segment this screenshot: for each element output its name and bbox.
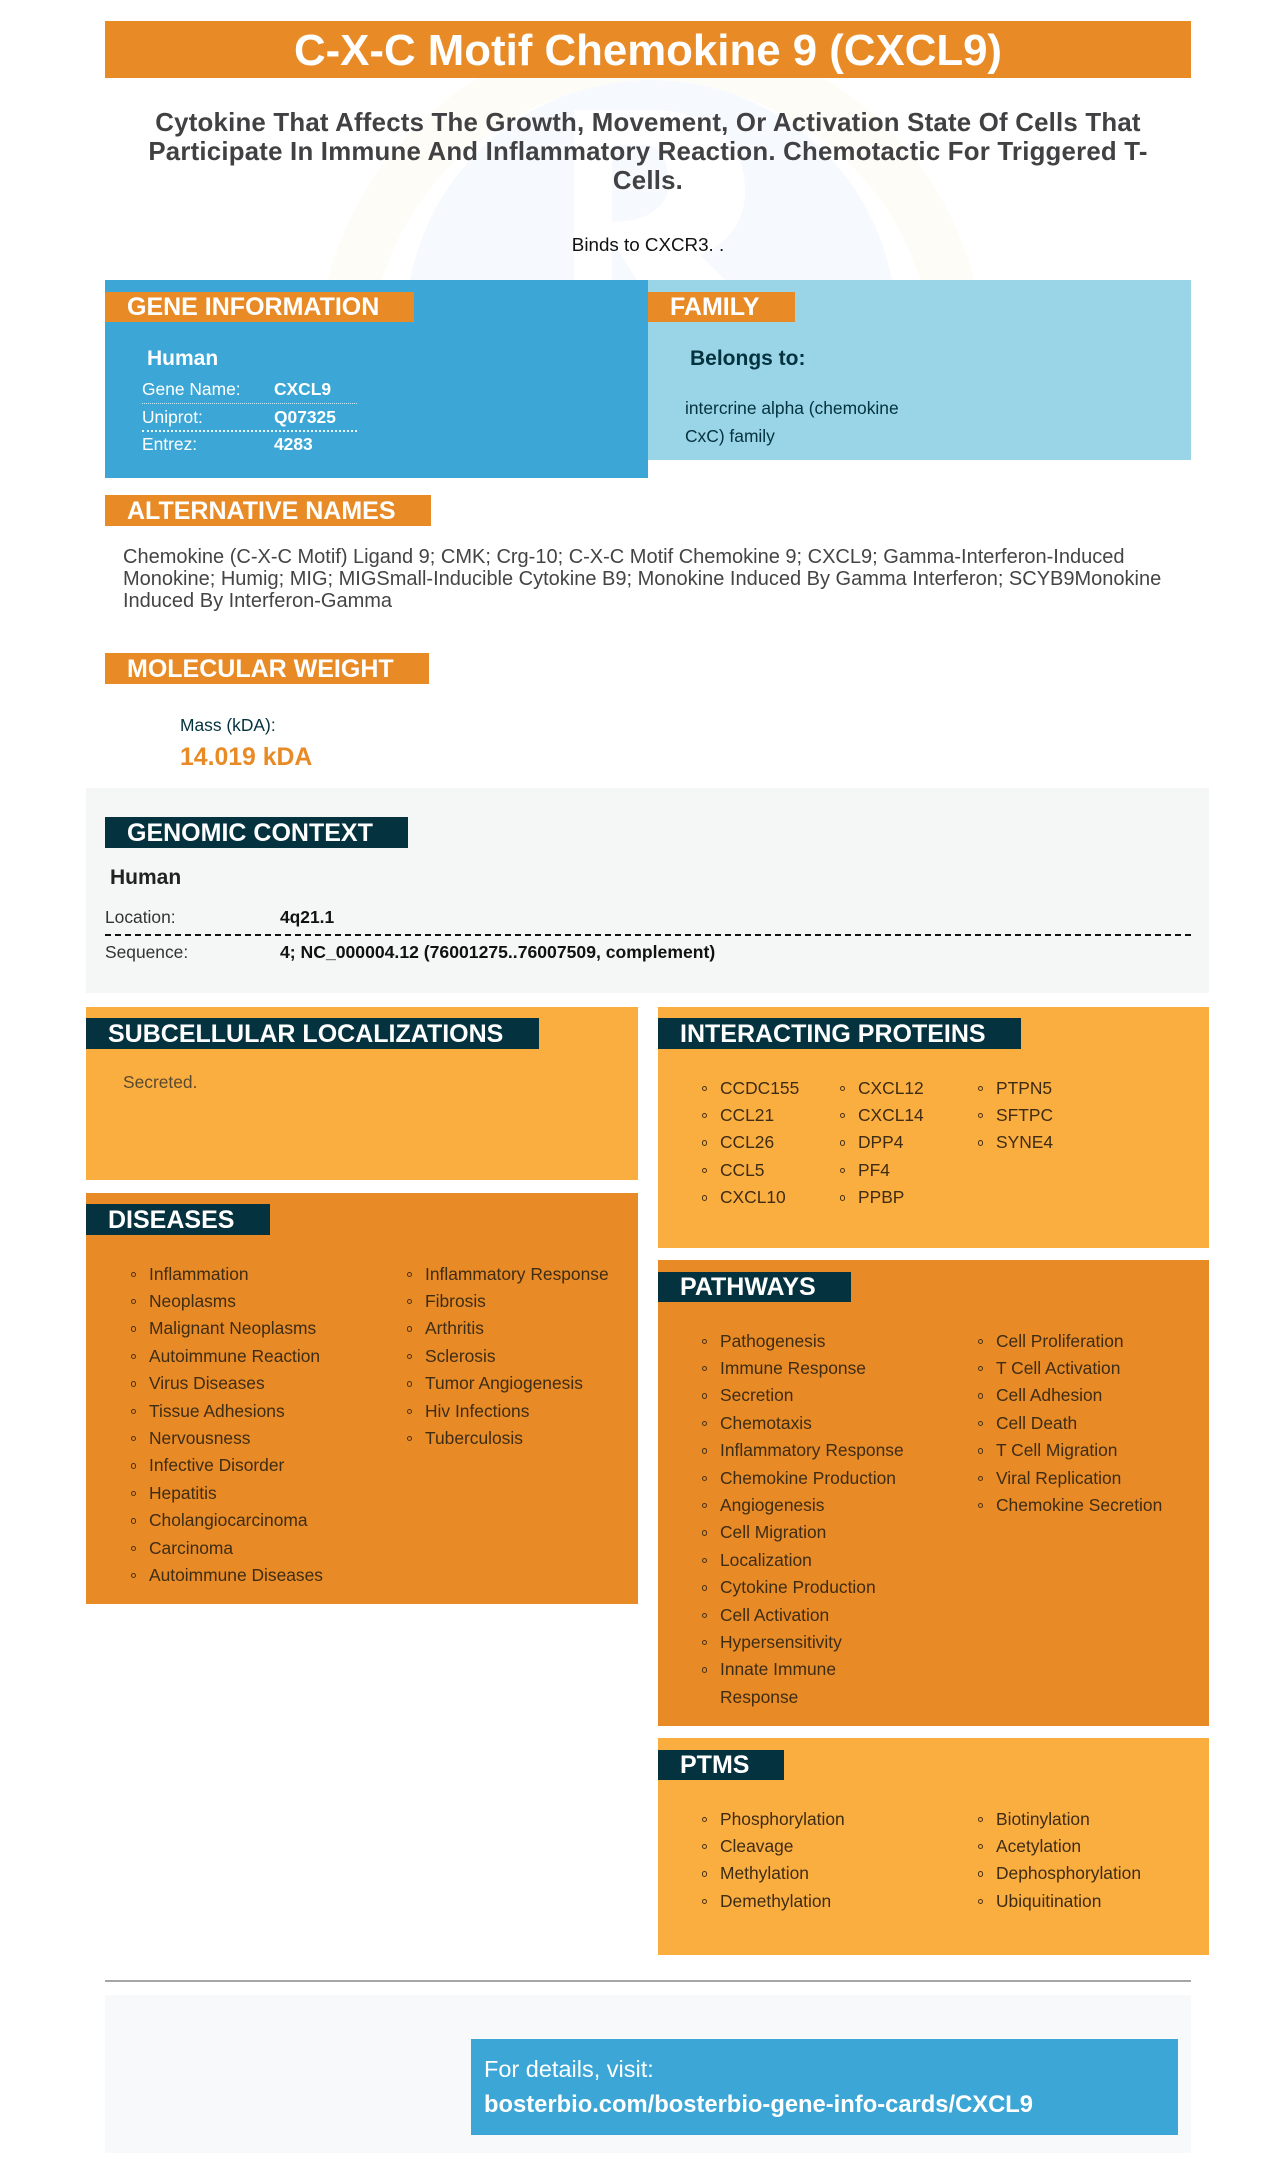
pathway list column 2: Viral Replication (996, 1468, 1121, 1488)
disease list column 1: Hepatitis (149, 1483, 217, 1503)
panel: subcellular localizations (86, 1007, 638, 1180)
gene name row: Gene Name: (142, 379, 241, 399)
location row (105, 907, 334, 927)
heading: pathways (658, 1272, 851, 1302)
ptm list column 1: Cleavage (720, 1836, 793, 1856)
protein list column 1: CCDC155 (720, 1078, 799, 1098)
belongs to label: Belongs to: (690, 347, 806, 370)
heading: gene information: GENE INFORMATION (127, 293, 379, 321)
disease list column 1 (131, 1264, 323, 1585)
protein list column 2 (840, 1078, 924, 1207)
pathway list column 2: Cell Proliferation (996, 1331, 1124, 1351)
disease list column 1: Inflammation (149, 1264, 249, 1284)
heading: interacting proteins: INTERACTING PROTEINS (680, 1020, 986, 1048)
alternative names text: Chemokine (C-X-C Motif) Ligand 9; CMK; Crg-10; C-X-C Motif Chemokine 9; CXCL9; Gamma-Interferon-Induced (123, 546, 1124, 568)
protein list column 1 (702, 1078, 799, 1207)
alternative names text: Induced By Interferon-Gamma (123, 590, 392, 612)
heading: diseases (86, 1204, 270, 1235)
entrez row: 4283 (274, 434, 313, 454)
gene name row: CXCL9 (274, 379, 331, 399)
mass value: 14.019 kDA (180, 744, 312, 771)
heading: pathways: PATHWAYS (680, 1273, 816, 1301)
details label: For details, visit: (484, 2056, 654, 2082)
gene name row (142, 378, 357, 404)
entrez row (142, 434, 313, 454)
alternative names text: Monokine; Humig; MIG; MIGSmall-Inducible Cytokine B9; Monokine Induced By Gamma Interferon; SCYB9Monokine (123, 568, 1161, 590)
protein list column 3: PTPN5 (996, 1078, 1052, 1098)
location row: Location: (105, 907, 176, 927)
family description: CxC) family (685, 426, 775, 446)
heading: family (648, 292, 795, 322)
disease list column 2: Hiv Infections (425, 1401, 529, 1421)
heading: genomic context: GENOMIC CONTEXT (127, 819, 373, 847)
details url: bosterbio.com/bosterbio-gene-info-cards/CXCL9 (484, 2091, 1033, 2118)
disease list column 1: Autoimmune Reaction (149, 1346, 320, 1366)
protein list column 2: CXCL12 (858, 1078, 924, 1098)
pathway list column 2: Chemokine Secretion (996, 1495, 1162, 1515)
panel: gene information (105, 280, 648, 478)
pathway list column 2: Cell Adhesion (996, 1385, 1102, 1405)
disease list column 1: Infective Disorder (149, 1455, 284, 1475)
ptm list column 2: Dephosphorylation (996, 1863, 1141, 1883)
panel: pathways (658, 1260, 1209, 1726)
sequence row: 4; NC_000004.12 (76001275..76007509, complement) (280, 942, 715, 962)
panel: pathways: Response (720, 1687, 798, 1707)
disease list column 1: Malignant Neoplasms (149, 1318, 316, 1338)
pathway list column 1: Cytokine Production (720, 1577, 876, 1597)
pathway list column 2 (978, 1331, 1162, 1515)
panel: family (648, 280, 1191, 460)
family description: intercrine alpha (chemokine (685, 398, 899, 418)
disease list column 2: Tuberculosis (425, 1428, 523, 1448)
heading: family: FAMILY (670, 293, 759, 321)
sequence row: Sequence: (105, 942, 188, 962)
disease list column 1: Cholangiocarcinoma (149, 1510, 308, 1530)
title: C-X-C Motif Chemokine 9 (CXCL9) (294, 26, 1002, 75)
disease list column 1: Carcinoma (149, 1538, 233, 1558)
pathway list column 1: Chemokine Production (720, 1468, 896, 1488)
subtitle: Cells. (613, 167, 683, 195)
heading: ptms (658, 1750, 784, 1780)
subtitle: Participate In Immune And Inflammatory Reaction. Chemotactic For Triggered T- (148, 138, 1148, 166)
heading: alternative names: ALTERNATIVE NAMES (127, 497, 396, 525)
entrez row: Entrez: (142, 434, 197, 454)
species label: Human (110, 866, 181, 889)
panel: genomic context (86, 788, 1209, 993)
protein list column 3: SYNE4 (996, 1132, 1053, 1152)
protein list column 3: SFTPC (996, 1105, 1053, 1125)
pathway list column 1: Hypersensitivity (720, 1632, 842, 1652)
heading: molecular weight: MOLECULAR WEIGHT (127, 655, 394, 683)
protein list column 2: DPP4 (858, 1132, 903, 1152)
mass label: Mass (kDA): (180, 715, 276, 735)
pathway list column 1 (702, 1331, 904, 1707)
disease list column 2: Fibrosis (425, 1291, 486, 1311)
pathway list column 1: Immune Response (720, 1358, 866, 1378)
disease list column 1: Autoimmune Diseases (149, 1565, 323, 1585)
ptm list column 2: Acetylation (996, 1836, 1081, 1856)
pathway list column 1: Cell Activation (720, 1605, 829, 1625)
function text: Binds to CXCR3. . (572, 234, 724, 255)
disease list column 2: Sclerosis (425, 1346, 496, 1366)
uniprot row (142, 406, 357, 432)
ptm list column 1: Methylation (720, 1863, 809, 1883)
protein list column 1: CCL26 (720, 1132, 774, 1152)
protein list column 3 (978, 1078, 1053, 1152)
ptm list column 1 (702, 1809, 845, 1911)
ptm list column 1: Demethylation (720, 1891, 831, 1911)
alternative names text (123, 546, 1161, 612)
ptm list column 2: Biotinylation (996, 1809, 1090, 1829)
panel: ptms (658, 1738, 1209, 1955)
protein list column 1: CXCL10 (720, 1187, 786, 1207)
uniprot row: Q07325 (274, 407, 336, 427)
ptm list column 2: Ubiquitination (996, 1891, 1101, 1911)
protein list column 2: CXCL14 (858, 1105, 924, 1125)
family description (685, 398, 899, 446)
localization text: Secreted. (123, 1072, 197, 1092)
watermark logo (328, 78, 974, 280)
heading: ptms: PTMS (680, 1751, 749, 1779)
heading: subcellular localizations: SUBCELLULAR LOCALIZATIONS (108, 1020, 503, 1048)
pathway list column 1: Chemotaxis (720, 1413, 812, 1433)
pathway list column 1: Localization (720, 1550, 812, 1570)
panel: diseases (86, 1193, 638, 1604)
species label: Human (147, 347, 218, 370)
uniprot row: Uniprot: (142, 407, 203, 427)
pathway list column 1: Inflammatory Response (720, 1440, 904, 1460)
ptm list column 2 (978, 1809, 1141, 1911)
disease list column 2: Tumor Angiogenesis (425, 1373, 583, 1393)
disease list column 1: Tissue Adhesions (149, 1401, 285, 1421)
disease list column 1: Neoplasms (149, 1291, 236, 1311)
disease list column 2: Arthritis (425, 1318, 484, 1338)
pathway list column 1: Angiogenesis (720, 1495, 824, 1515)
protein list column 1: CCL5 (720, 1160, 764, 1180)
callout: details link (471, 2039, 1178, 2135)
pathway list column 2: T Cell Activation (996, 1358, 1120, 1378)
location row: 4q21.1 (280, 907, 334, 927)
pathway list column 1: Pathogenesis (720, 1331, 825, 1351)
subtitle (148, 109, 1148, 195)
ptm list column 1: Phosphorylation (720, 1809, 845, 1829)
panel: footer (105, 1995, 1191, 2153)
pathway list column 2: T Cell Migration (996, 1440, 1117, 1460)
protein list column 2: PF4 (858, 1160, 890, 1180)
title (105, 21, 1191, 78)
disease list column 2 (407, 1264, 609, 1448)
subtitle: Cytokine That Affects The Growth, Movement, Or Activation State Of Cells That (155, 109, 1141, 137)
disease list column 1: Virus Diseases (149, 1373, 265, 1393)
pathway list column 1: Cell Migration (720, 1522, 826, 1542)
disease list column 2: Inflammatory Response (425, 1264, 609, 1284)
heading: diseases: DISEASES (108, 1206, 234, 1234)
pathway list column 1: Secretion (720, 1385, 793, 1405)
pathway list column 1: Innate Immune (720, 1659, 836, 1679)
panel: interacting proteins (658, 1007, 1209, 1248)
disease list column 1: Nervousness (149, 1428, 250, 1448)
pathway list column 2: Cell Death (996, 1413, 1077, 1433)
protein list column 1: CCL21 (720, 1105, 774, 1125)
protein list column 2: PPBP (858, 1187, 904, 1207)
